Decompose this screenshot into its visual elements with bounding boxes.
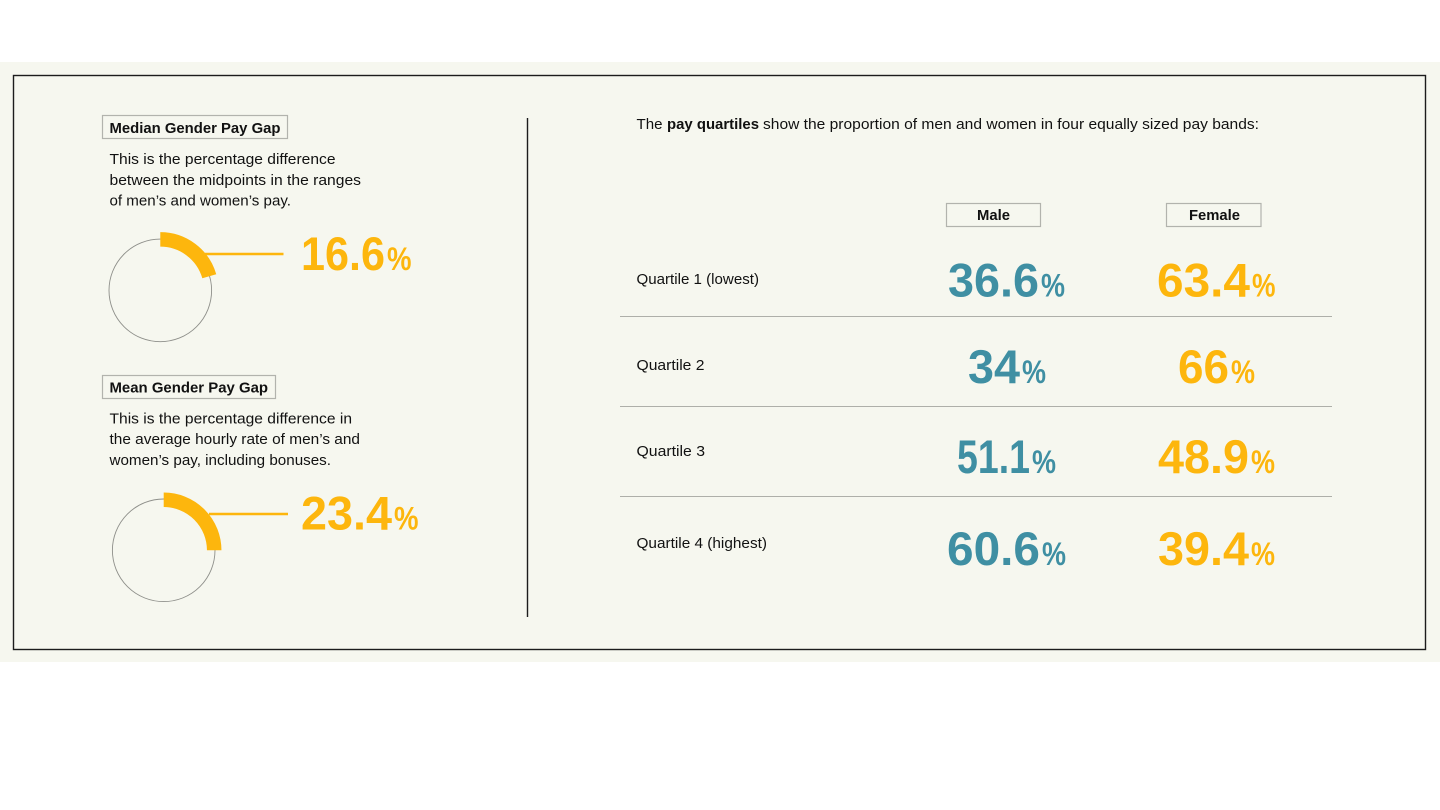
row: quartile 3 bbox=[636, 430, 1275, 483]
text block: mean description bbox=[108, 410, 360, 469]
text block: mean description: This is the percentage difference in bbox=[110, 410, 352, 428]
value: 23.4%: 23.4 bbox=[301, 486, 392, 540]
row: quartile 1: 36.6 bbox=[948, 254, 1039, 306]
row: quartile 4: 60.6 bbox=[947, 522, 1040, 575]
chart: mean donut 23.4% bbox=[112, 499, 288, 602]
row: quartile 2: % bbox=[1231, 354, 1255, 390]
row: quartile 3: % bbox=[1032, 444, 1056, 480]
text block: pay quartiles intro: show the proportion of men and women in four equally sized pay bands: bbox=[763, 116, 1259, 133]
heading: median gender pay gap: Median Gender Pay Gap bbox=[110, 120, 280, 137]
row: quartile 3: 48.9 bbox=[1158, 430, 1249, 483]
text block: mean description: the average hourly rate of men’s and bbox=[110, 431, 360, 448]
text block: median description: of men’s and women’s pay. bbox=[110, 192, 291, 210]
chart: median donut 16.6% bbox=[109, 239, 284, 342]
panel: median gender pay gap bbox=[102, 116, 412, 342]
row: quartile 4: % bbox=[1251, 536, 1275, 572]
row: quartile 4: % bbox=[1042, 536, 1066, 572]
row: quartile 4: 39.4 bbox=[1158, 522, 1249, 575]
row: quartile 3: Quartile 3 bbox=[636, 443, 705, 460]
text block: median description bbox=[110, 151, 361, 210]
heading: mean gender pay gap bbox=[102, 376, 276, 398]
heading: median gender pay gap bbox=[102, 116, 288, 138]
text block: median description: between the midpoints in the ranges bbox=[110, 172, 361, 189]
column header: male bbox=[946, 204, 1040, 226]
row: quartile 1: % bbox=[1041, 268, 1065, 304]
column header: female bbox=[1166, 204, 1261, 226]
vertical divider bbox=[526, 118, 528, 617]
row: quartile 3: 51.1 bbox=[957, 430, 1030, 483]
row: quartile 1: Quartile 1 (lowest) bbox=[636, 271, 759, 288]
panel: outer frame bbox=[14, 76, 1426, 650]
panel: mean gender pay gap bbox=[102, 376, 418, 602]
row: quartile 2: 34 bbox=[968, 340, 1020, 393]
column header: male: Male bbox=[977, 207, 1010, 224]
column header: female: Female bbox=[1189, 207, 1240, 224]
text block: pay quartiles intro: The bbox=[636, 116, 662, 133]
row: quartile 2: Quartile 2 bbox=[636, 357, 704, 374]
row: quartile 3: % bbox=[1251, 444, 1275, 480]
text block: median description: This is the percentage difference bbox=[110, 151, 336, 168]
row: quartile 4 bbox=[636, 522, 1275, 575]
heading: mean gender pay gap: Mean Gender Pay Gap bbox=[110, 380, 268, 396]
value: 23.4%: % bbox=[394, 500, 418, 536]
row: quartile 1: 63.4 bbox=[1157, 254, 1250, 306]
row: quartile 1: % bbox=[1252, 268, 1276, 304]
row: quartile 2: 66 bbox=[1178, 340, 1229, 393]
value: 16.6%: 16.6 bbox=[301, 227, 385, 280]
row: quartile 1 bbox=[636, 254, 1276, 306]
text block: mean description: women’s pay, including bonuses. bbox=[108, 452, 331, 469]
value: 16.6%: % bbox=[387, 241, 412, 277]
text block: pay quartiles intro: pay quartiles bbox=[667, 116, 759, 133]
row: quartile 2 bbox=[636, 340, 1255, 393]
row: quartile 2: % bbox=[1022, 354, 1046, 390]
row: quartile 4: Quartile 4 (highest) bbox=[636, 535, 767, 552]
panel: background band bbox=[0, 62, 1440, 662]
